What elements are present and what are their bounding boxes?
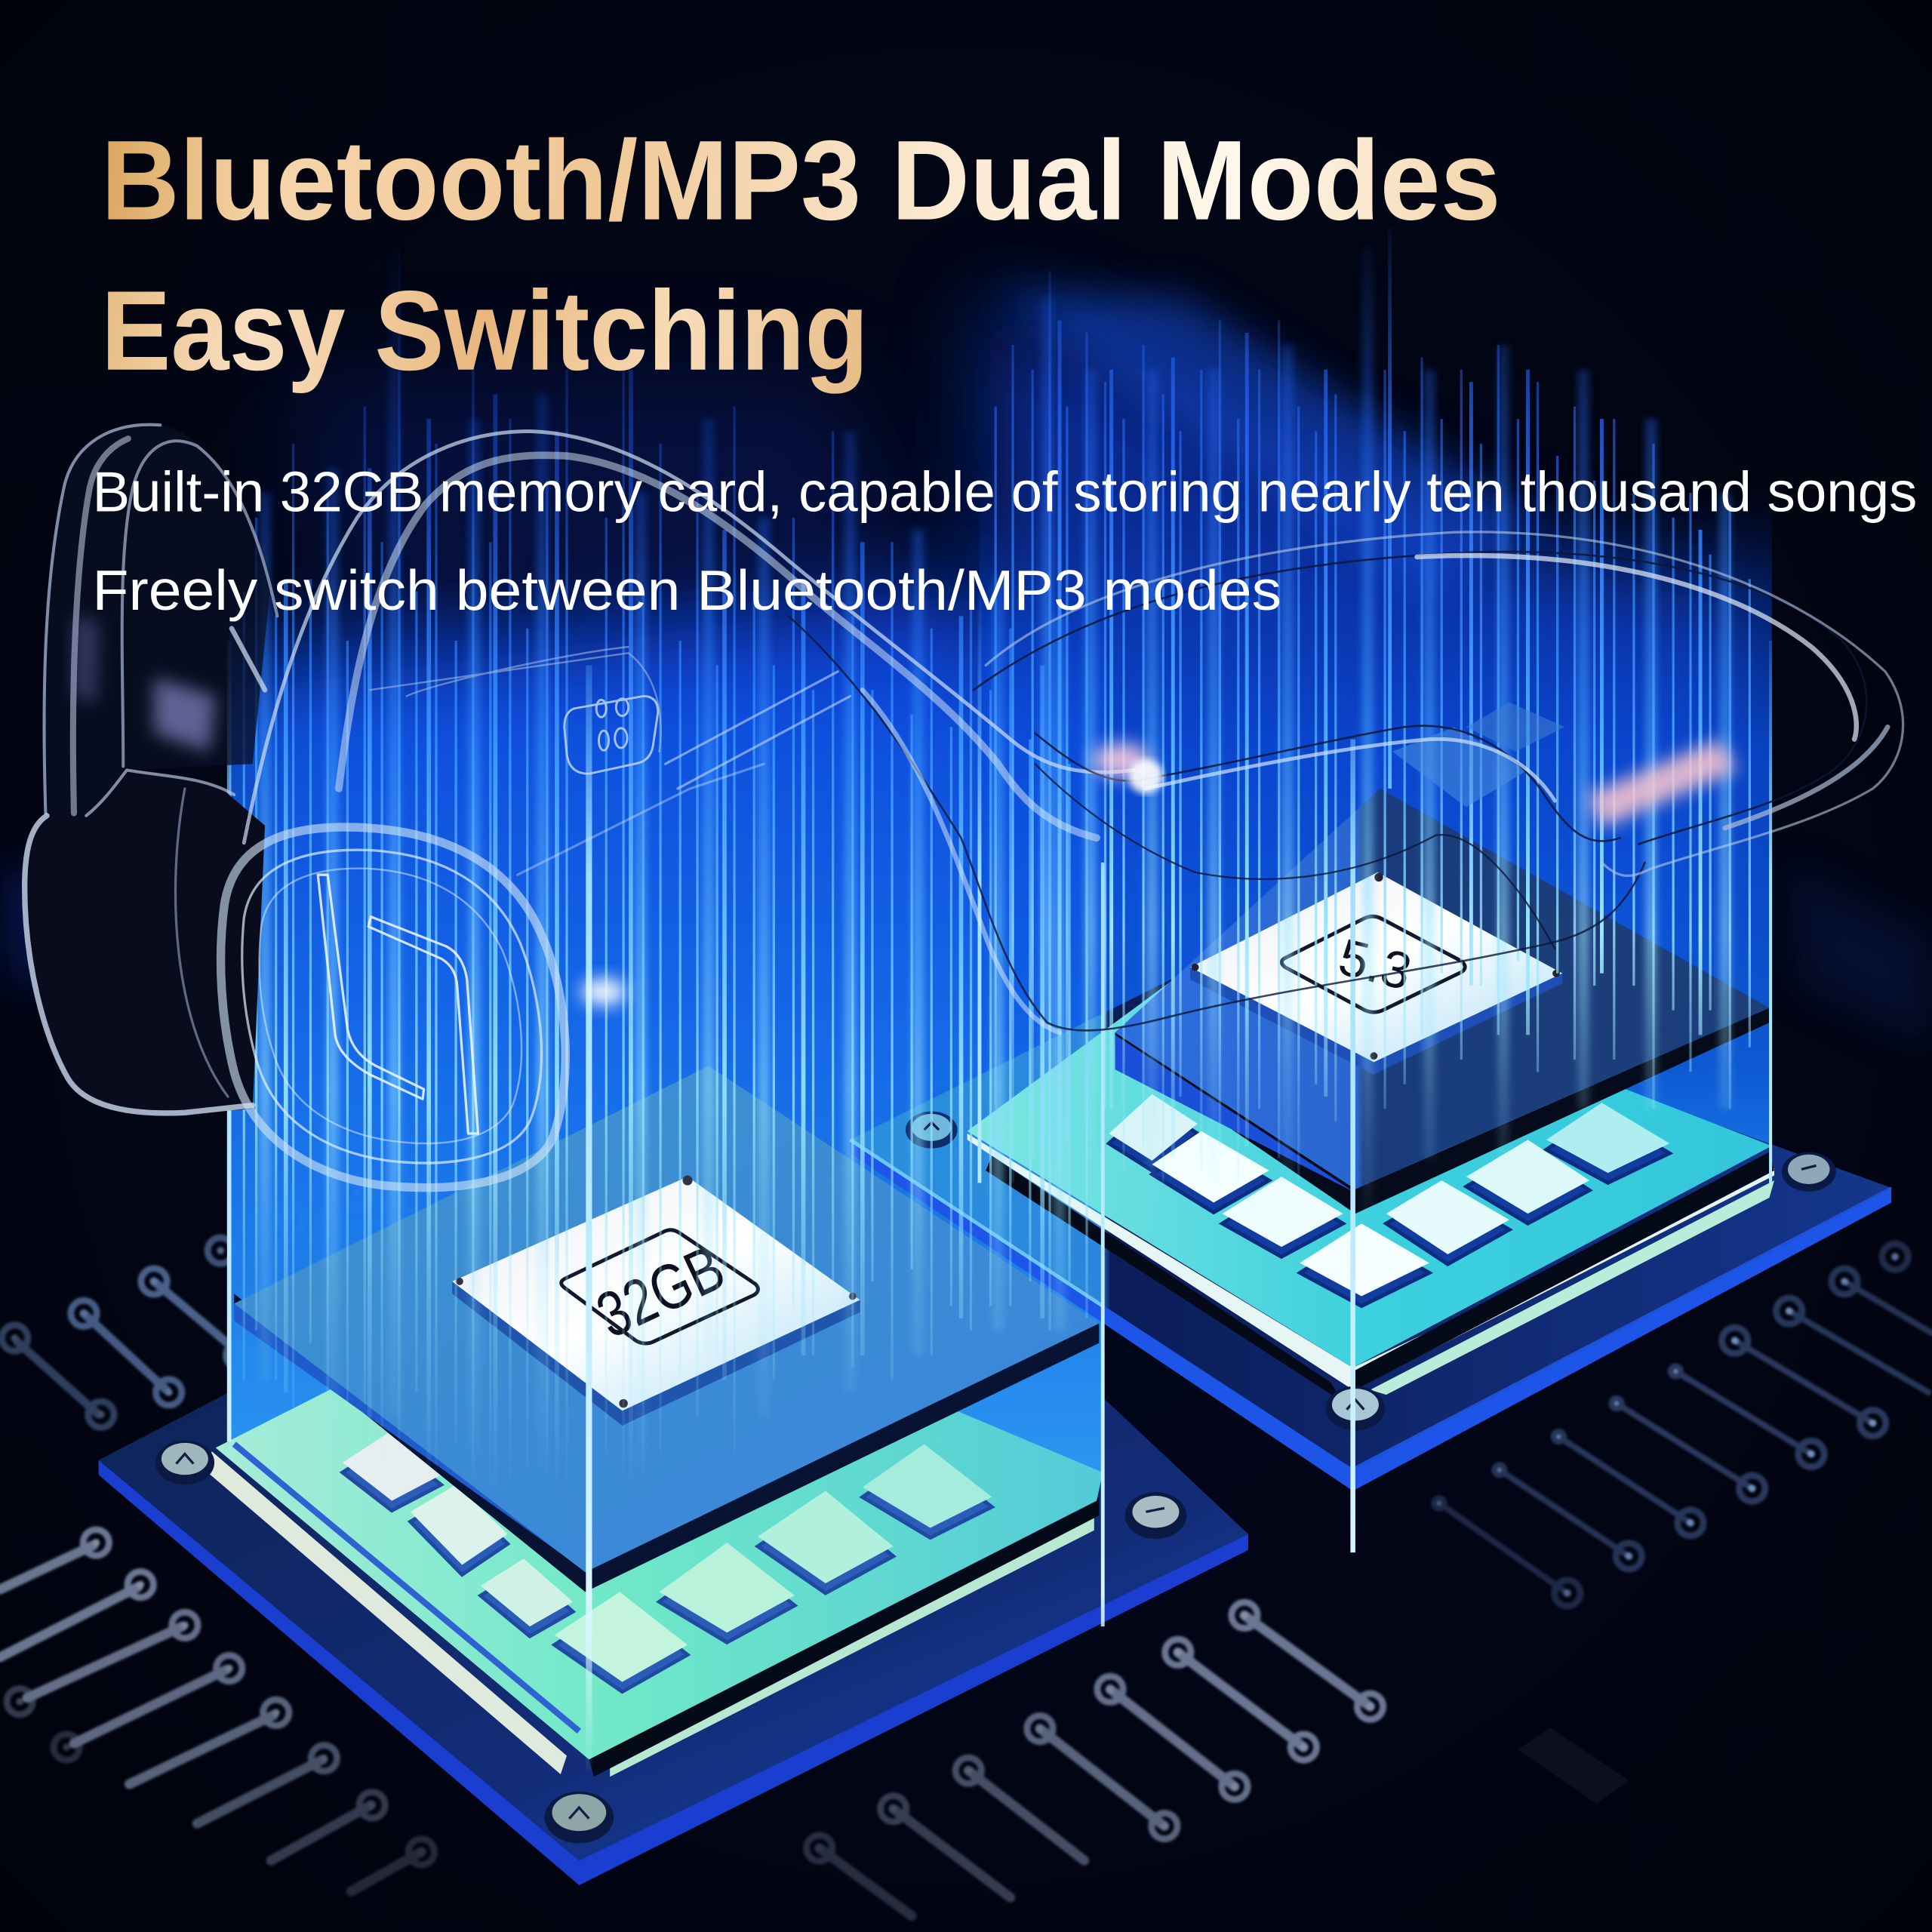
right upper plate (1115, 789, 1769, 1214)
left memory tile edges (343, 1443, 992, 1692)
headphones: front earcup (221, 827, 565, 1188)
right beam light streaks (995, 228, 1749, 1232)
circuit traces: right (1434, 1244, 1932, 1606)
right memory tile edges (1109, 1104, 1669, 1306)
pink highlight reflections (74, 616, 1737, 1005)
small dark component bottom right (1518, 1727, 1629, 1804)
left light beam column (229, 579, 1104, 1478)
right board screws (906, 1112, 1836, 1431)
chip label 32GB: 32GB (586, 1231, 735, 1352)
headphones: neckband and right hook (244, 431, 1903, 1032)
board glimpses behind beams (1392, 703, 1564, 807)
left base plate (203, 1257, 1103, 1777)
description line 1: Built-in 32GB memory card, capable of storing nearly ten thousand songs (92, 460, 1917, 524)
description line 2: Freely switch between Bluetooth/MP3 modes (92, 558, 1281, 622)
circuit traces: bottom centre (807, 1602, 1383, 1916)
left memory tiles (343, 1433, 992, 1682)
right light beam column (980, 493, 1772, 1208)
left upper plate (234, 1066, 1099, 1592)
right base plate (968, 937, 1774, 1402)
right beam edge lines (980, 592, 1770, 1552)
right memory tiles (1109, 1094, 1669, 1297)
left beam edge lines (229, 641, 1103, 1774)
headphones: rear earcup and band (24, 425, 277, 1115)
right white chip with 5.3 label (1190, 872, 1562, 1075)
headphones: control buttons (565, 696, 658, 774)
left board screws (155, 1441, 1186, 1843)
circuit traces: upper left (2, 1180, 371, 1427)
title line 2: Easy Switching (101, 267, 869, 394)
title line 1: Bluetooth/MP3 Dual Modes (101, 117, 1501, 244)
blurred blue circuit glow (0, 296, 1932, 1232)
right chip stack: 5.3 (851, 789, 1891, 1491)
circuit traces: lower left (0, 1530, 435, 1891)
chip label 5.3: 5.3 (1334, 928, 1417, 1001)
left chip stack: 32GB (155, 1066, 1186, 1843)
right circuit board (851, 949, 1891, 1491)
left beam light streaks (244, 234, 1087, 1601)
left circuit board (99, 1380, 1248, 1885)
left white chip with 32GB label (452, 1176, 860, 1426)
